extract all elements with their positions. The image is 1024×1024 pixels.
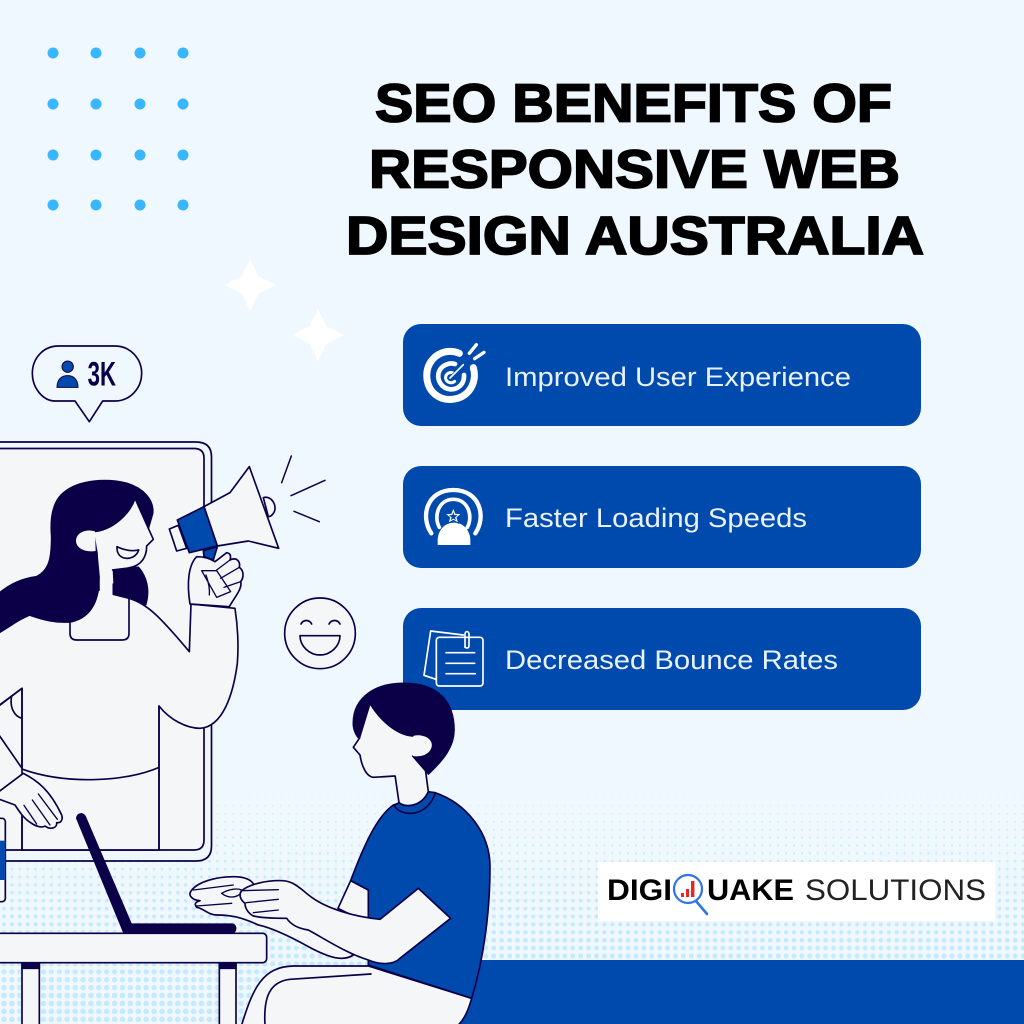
icon: clipped notes (424, 631, 483, 686)
man's hair (353, 683, 454, 774)
man's face (353, 703, 425, 777)
woman's sweater (0, 598, 238, 850)
monitor frame (0, 442, 212, 861)
icon: person (57, 361, 78, 387)
label: improved user experience: Improved User Experience (505, 362, 851, 392)
man's upper arm (338, 881, 368, 923)
title: SEO BENEFITS OF (375, 74, 892, 134)
speech bubble: 3K followers (32, 346, 142, 422)
sparkle stars (224, 259, 344, 361)
title (346, 74, 924, 266)
hair behind neck (110, 567, 148, 605)
man's back hand and forearm (190, 877, 353, 958)
follower count: 3K (88, 356, 116, 394)
bottom blue band (455, 960, 1024, 1024)
woman's left hand (0, 773, 62, 828)
sweater details (0, 688, 159, 850)
label: decreased bounce rates: Decreased Bounce Rates (505, 645, 838, 675)
hand (188, 553, 243, 607)
icon: target (427, 345, 484, 399)
desk (0, 933, 267, 1024)
icon: magnifier with bars (674, 875, 707, 914)
panel: decreased bounce rates (403, 608, 921, 710)
icon: smiley face (285, 598, 355, 669)
mouth (117, 547, 139, 558)
title: DESIGN AUSTRALIA (346, 206, 924, 266)
label: faster loading speeds: Faster Loading Speeds (505, 503, 807, 533)
man's legs (242, 966, 472, 1024)
man's front arm (240, 881, 451, 964)
logo (598, 862, 995, 921)
sound lines (282, 456, 325, 522)
hair (0, 481, 153, 635)
object at left edge (0, 818, 5, 902)
logo: UAKE (707, 874, 794, 907)
shirt collar (394, 792, 435, 813)
laptop (76, 813, 236, 933)
decorative dot grid (48, 48, 188, 210)
illustration: woman with megaphone (0, 456, 325, 850)
icon: broadcast star (426, 490, 481, 545)
neck and collar (70, 550, 129, 640)
panel: improved user experience (403, 324, 921, 426)
megaphone (169, 467, 279, 560)
logo: SOLUTIONS (805, 874, 986, 907)
panel: faster loading speeds (403, 466, 921, 568)
man's neck (395, 767, 428, 806)
man's t-shirt (351, 793, 490, 998)
illustration: lower body of woman, laptop, desk and man (0, 683, 490, 1024)
logo: DIGI (607, 874, 672, 907)
man's ear (413, 735, 432, 756)
ear (76, 530, 96, 551)
face (88, 498, 153, 583)
title: RESPONSIVE WEB (369, 140, 900, 200)
